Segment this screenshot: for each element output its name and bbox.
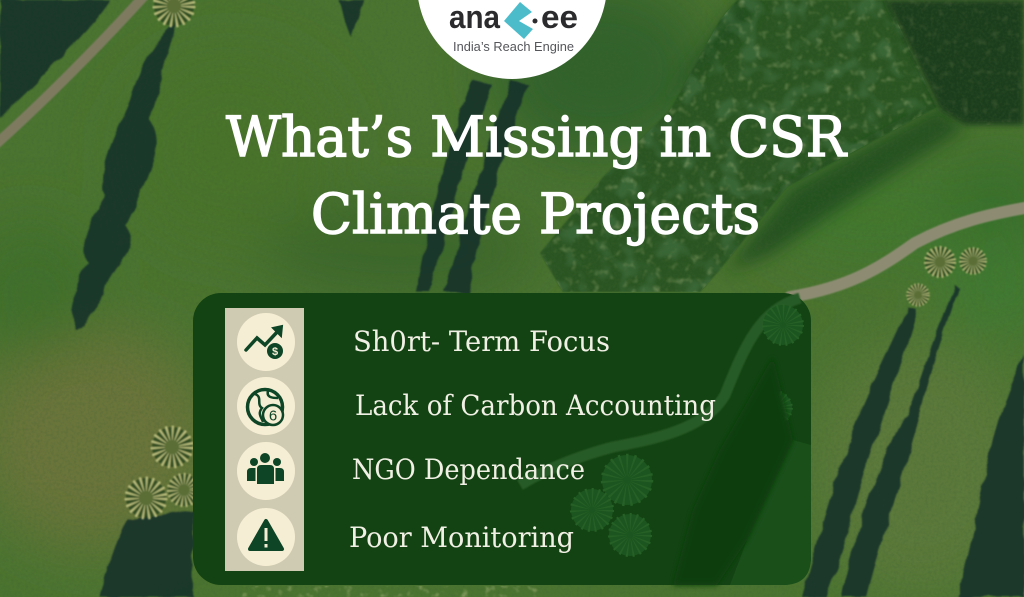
list items [349,325,716,554]
logo wordmark [449,0,578,39]
item: lack of carbon accounting: Lack of Carbon Accounting [355,389,716,422]
shrub band [540,0,937,292]
icon: globe with number 6: 6 [269,408,277,424]
content panel [193,293,811,585]
icon column strip [225,308,304,571]
logo wordmark: ana [449,0,500,35]
icon: growth chart with dollar: $ [272,346,278,358]
icon: group of people [237,442,295,500]
title: Climate Projects [311,182,760,246]
logo badge [417,0,607,79]
icon: globe with number 6 [237,377,295,435]
forest top right [885,0,1024,125]
title [226,105,848,246]
palm trees [126,0,986,518]
paths through the park [0,0,1024,297]
title: What’s Missing in CSR [226,105,848,169]
icon: growth chart with dollar [237,313,295,371]
item: short-term focus: Sh0rt- Term Focus [353,325,610,358]
item: poor monitoring: Poor Monitoring [349,521,574,554]
logo wordmark: ee [541,0,578,35]
shadow beside shrub band [725,105,965,272]
item: ngo dependance: NGO Dependance [352,453,585,486]
logo tagline: India’s Reach Engine [453,39,574,54]
icon: warning triangle [237,508,295,566]
